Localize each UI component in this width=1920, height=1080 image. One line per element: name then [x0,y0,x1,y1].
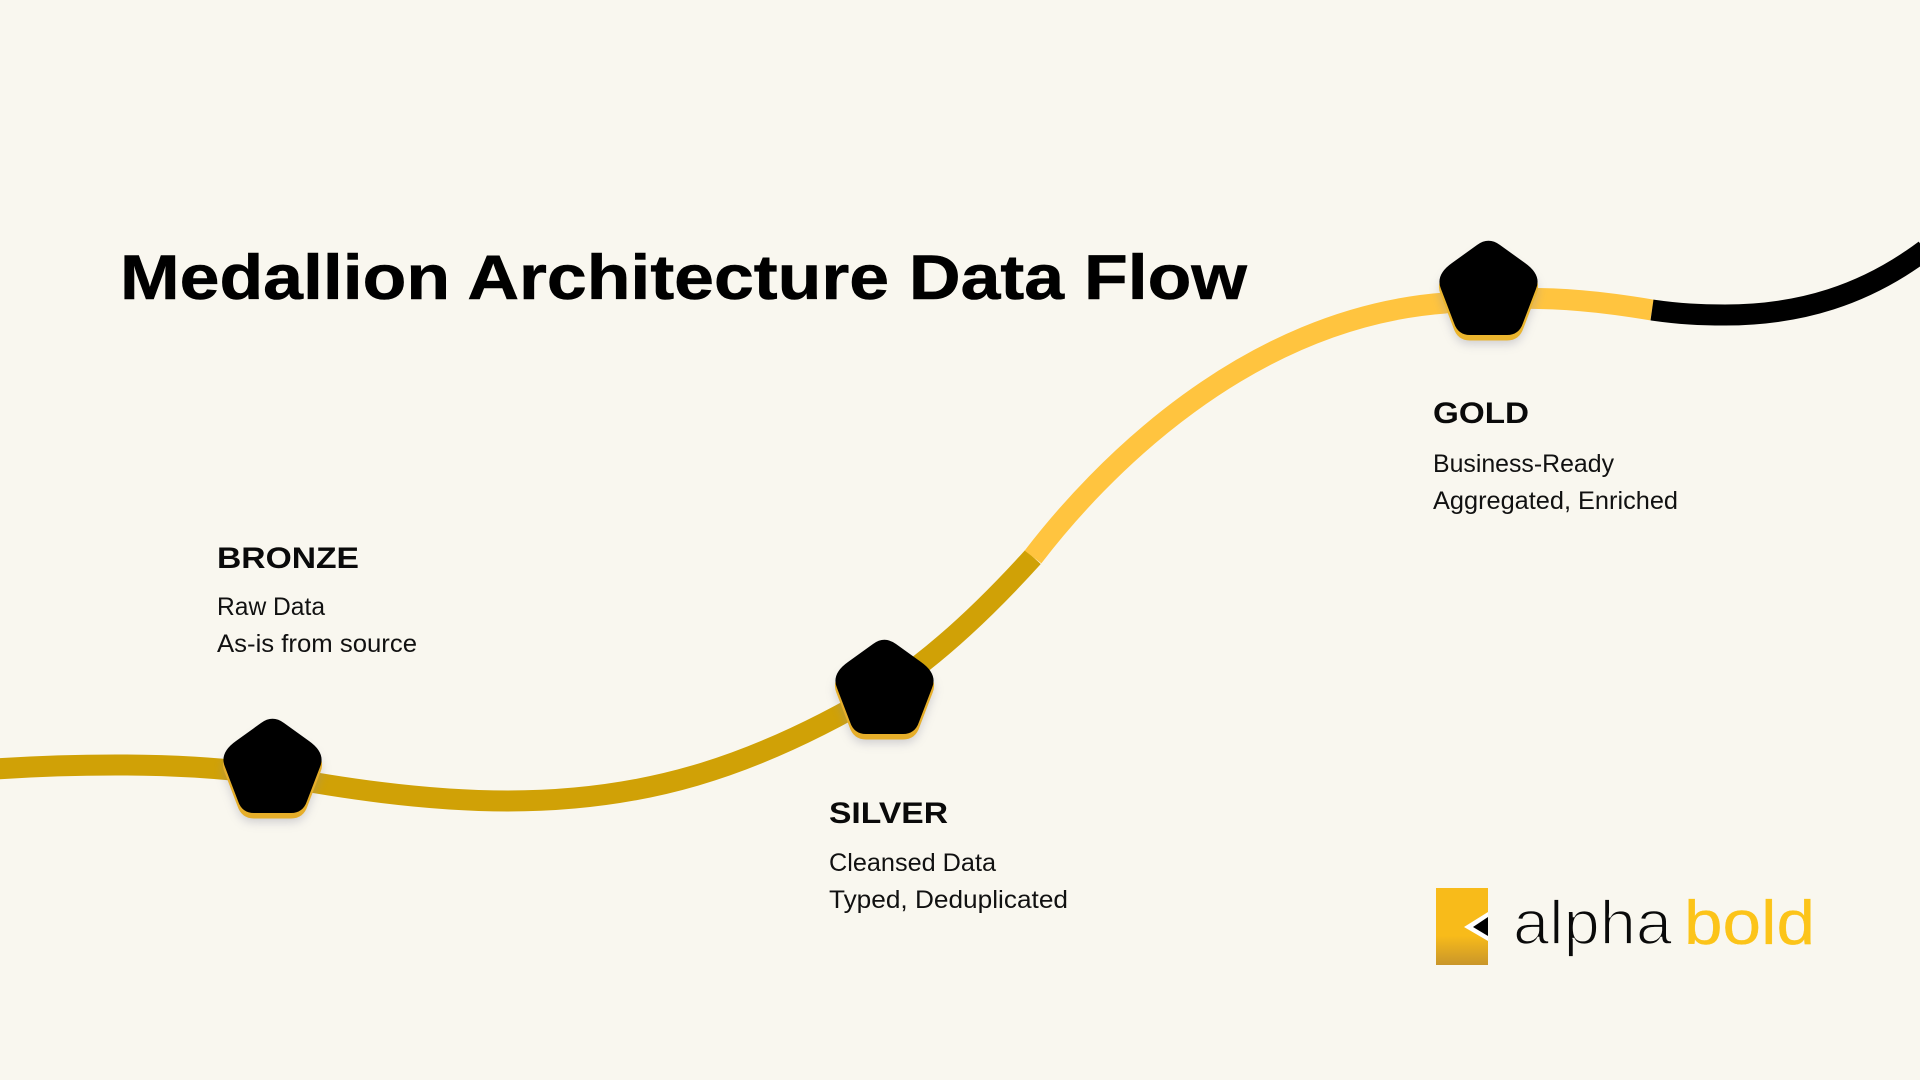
flow line: outgoing black segment [1652,250,1920,315]
heading: gold: GOLD [1433,397,1529,430]
text block: bronze [217,542,417,658]
description: raw data: Raw Data [217,593,325,621]
title: Medallion Architecture Data Flow [120,243,1248,313]
description: cleansed data: Cleansed Data [829,849,996,877]
heading: silver: SILVER [829,797,948,830]
marker: gold pentagon [1439,241,1538,344]
marker: silver pentagon [835,640,934,743]
flow line: bronze and silver segment [0,557,1033,801]
description: business-ready: Business-Ready [1433,450,1614,478]
flow line: gold segment [1033,298,1652,557]
marker: bronze pentagon [223,719,322,822]
logo text: bold: bold [1684,889,1815,958]
logo text: alpha: alpha [1513,889,1673,958]
description: aggregated, enriched: Aggregated, Enriched [1433,487,1678,515]
heading: bronze: BRONZE [217,542,359,575]
logo: alphabold [1436,888,1815,965]
description: typed, deduplicated: Typed, Deduplicated [829,886,1068,914]
icon: logo mark [1436,888,1488,965]
description: as-is from source: As-is from source [217,630,417,658]
text block: silver [829,797,1068,914]
text block: gold [1433,397,1678,515]
